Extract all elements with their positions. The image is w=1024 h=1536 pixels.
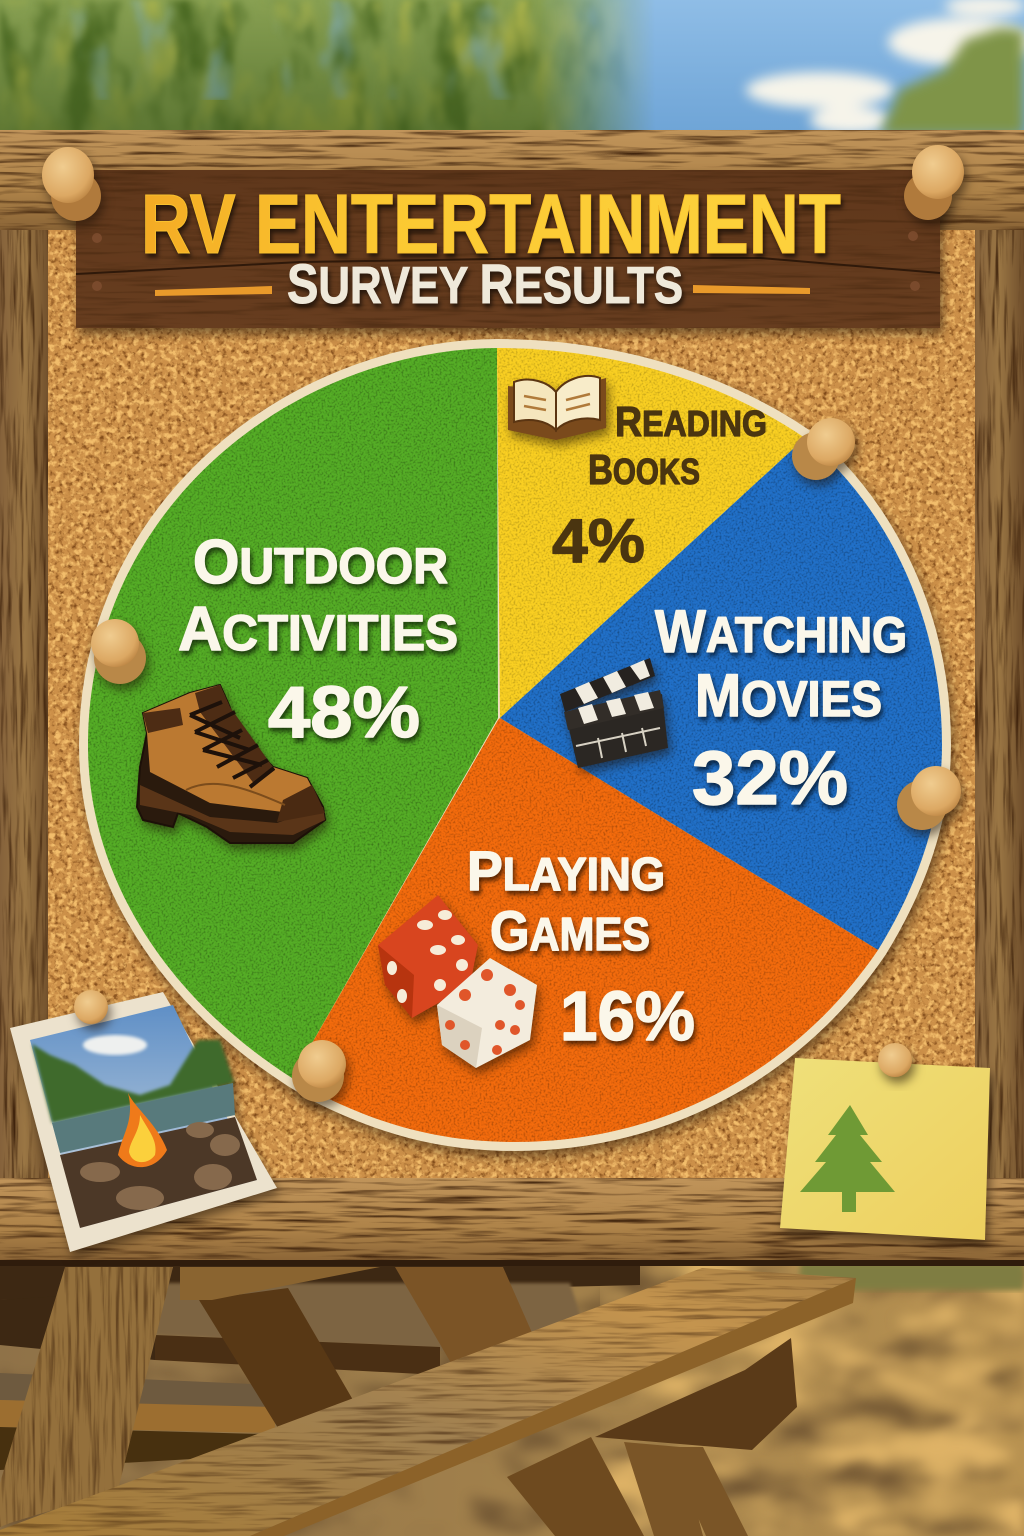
lower leg pair <box>624 1442 748 1536</box>
label: watching movies <box>655 598 907 821</box>
pin: pie left <box>91 619 146 684</box>
label: reading books: READING <box>615 398 767 445</box>
pin: sticky note <box>878 1043 912 1077</box>
label: reading books <box>552 398 767 576</box>
label: watching movies: 32% <box>692 736 848 821</box>
frame: right post <box>974 225 1024 1185</box>
cork board <box>48 218 975 1193</box>
pin: pie top right <box>792 418 855 480</box>
table leg: centre <box>395 1267 533 1363</box>
bench plank <box>0 1268 856 1536</box>
accent line right <box>693 285 810 294</box>
heading: RV Entertainment: RV ENTERTAINMENT <box>141 177 841 271</box>
pin: top right <box>904 145 964 220</box>
table leg: front left <box>0 1267 173 1527</box>
label: reading books: BOOKS <box>588 446 700 493</box>
label: watching movies: MOVIES <box>695 662 882 729</box>
icon: open book <box>508 376 606 440</box>
icon: hiking boot <box>137 685 325 843</box>
cross beam <box>595 1338 797 1450</box>
table leg: inner left <box>199 1288 353 1428</box>
slice: watching movies 32% <box>500 438 942 950</box>
slice: outdoor activities 48% <box>88 348 498 1078</box>
background: ground and picnic table <box>0 1255 1024 1536</box>
left tree <box>0 0 680 135</box>
label: outdoor activities: ACTIVITIES <box>178 595 458 664</box>
title banner <box>76 170 940 328</box>
subheading: Survey Results: SURVEY RESULTS <box>287 252 683 315</box>
slice: reading books 4% <box>497 348 805 718</box>
slice: playing games 16% <box>292 718 878 1142</box>
sticky note with tree <box>780 1058 990 1240</box>
label: reading books: 4% <box>552 507 645 576</box>
pin: pie bottom <box>292 1040 346 1102</box>
label: playing games <box>467 839 695 1055</box>
pin: top left <box>42 147 101 221</box>
background: sky and trees <box>0 0 1024 135</box>
label: playing games: GAMES <box>490 899 650 962</box>
label: outdoor activities <box>178 528 458 753</box>
right tree <box>880 28 1024 135</box>
pin: photo <box>74 990 108 1024</box>
wooden push pins <box>42 145 964 1102</box>
lower legs <box>507 1437 644 1536</box>
accent line left <box>155 286 272 296</box>
table brace <box>180 1267 380 1300</box>
label: watching movies: WATCHING <box>655 598 907 665</box>
wooden frame <box>0 130 1024 1266</box>
icon: dice <box>378 895 537 1068</box>
pin: pie right <box>897 766 961 830</box>
icon: pine tree <box>800 1105 895 1212</box>
label: outdoor activities: 48% <box>268 673 420 753</box>
frame: bottom beam <box>0 1178 1024 1266</box>
label: outdoor activities: OUTDOOR <box>193 528 448 597</box>
frame: left post <box>0 225 50 1185</box>
clouds <box>746 0 1024 134</box>
white die <box>437 958 537 1068</box>
label: playing games: PLAYING <box>467 839 665 902</box>
icon: clapperboard <box>560 658 668 768</box>
red die <box>378 895 478 1018</box>
frame: top beam <box>0 130 1024 230</box>
label: playing games: 16% <box>560 977 695 1055</box>
photo: campfire by the river <box>10 992 277 1252</box>
pie chart <box>88 348 942 1142</box>
